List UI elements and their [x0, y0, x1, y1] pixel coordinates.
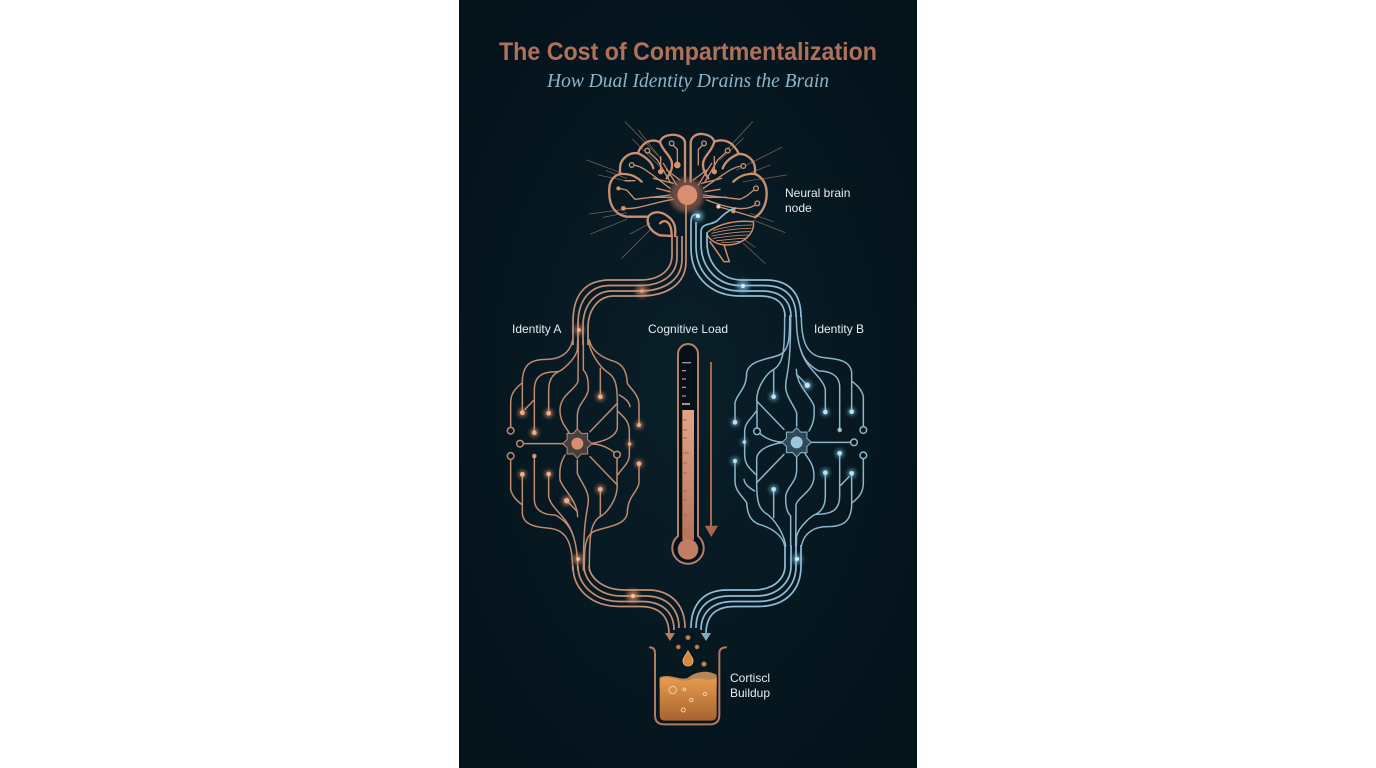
label: cognitive load: Cognitive Load: [648, 322, 728, 336]
pathway: identity B tubes to cortisol: [691, 545, 801, 634]
thermometer: cognitive load: [672, 344, 704, 564]
identity A neural tree: [507, 340, 643, 570]
brain outline: [609, 134, 767, 236]
pathway: identity A tubes from brain: [573, 205, 686, 345]
cerebellum: [707, 221, 753, 262]
title: The Cost of Compartmentalization: [499, 38, 877, 66]
label: neural brain node: node: [785, 201, 812, 215]
background panel: [459, 0, 917, 768]
beaker with cortisol: [650, 647, 726, 724]
label: identity A: Identity A: [512, 322, 561, 336]
cortisol droplets: [676, 636, 706, 666]
label: cortisol buildup: Cortiscl: [730, 671, 770, 685]
label: identity B: Identity B: [814, 322, 864, 336]
central hub: [669, 178, 704, 212]
brain energy rays: [587, 122, 787, 263]
arrow: identity B into beaker: [701, 633, 711, 641]
arrow: load direction: [705, 362, 718, 537]
brain node: [587, 122, 787, 263]
identity B neural tree: [731, 316, 867, 546]
label: cortisol buildup: Buildup: [730, 686, 770, 700]
pulse glows on the tubes: [573, 211, 802, 602]
pathway: identity A tubes to cortisol: [573, 566, 685, 634]
subtitle: How Dual Identity Drains the Brain: [546, 70, 829, 92]
brain circuit traces: [618, 144, 757, 217]
label: neural brain node: Neural brain: [785, 186, 850, 200]
pathway: identity B tubes from brain: [691, 208, 801, 317]
arrow: identity A into beaker: [665, 633, 675, 641]
